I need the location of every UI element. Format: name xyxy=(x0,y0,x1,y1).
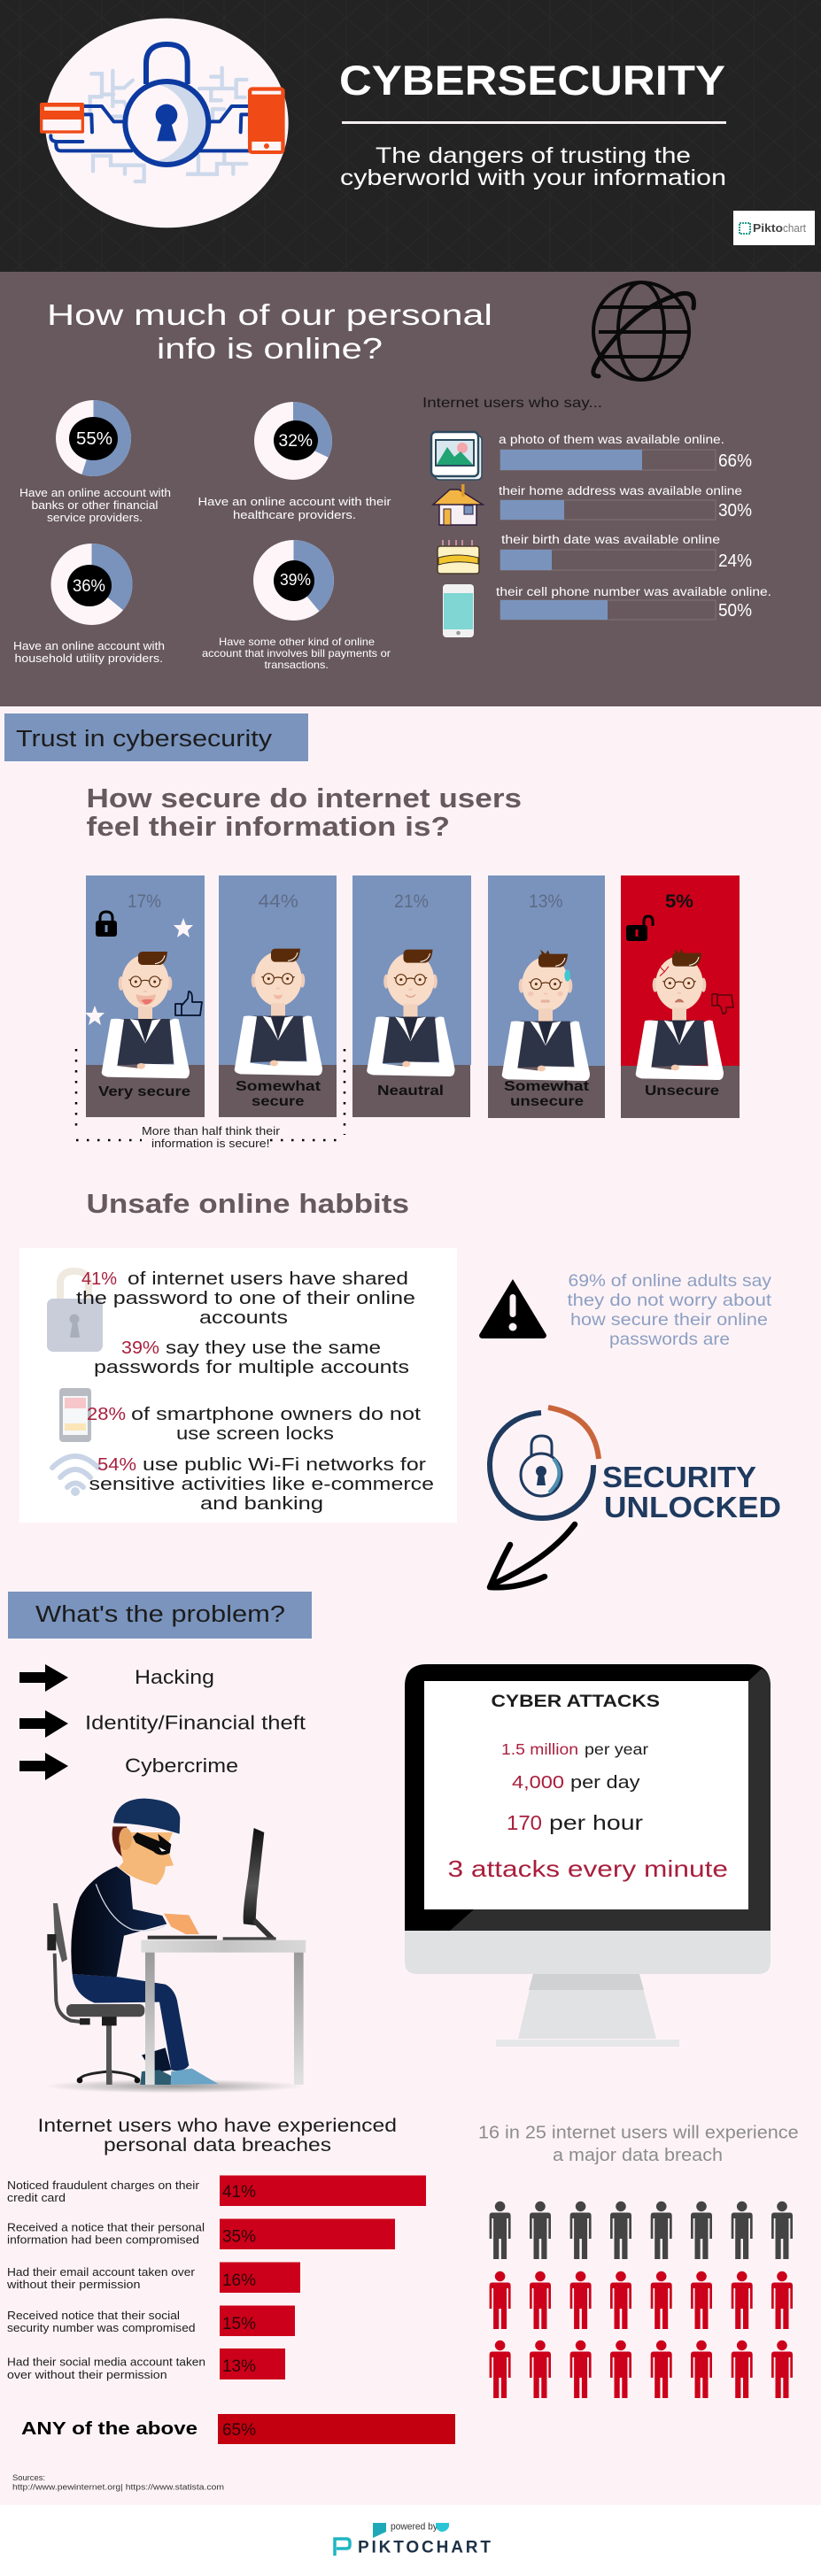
section banner: what's the problem: What's the problem? xyxy=(35,1602,285,1627)
icon: cake xyxy=(438,540,479,574)
bar label: home address: their home address was available online xyxy=(499,484,742,497)
stat: per day xyxy=(512,1773,639,1793)
stat: 39%: say they use the same xyxy=(166,1338,381,1358)
callout: dotted bracket xyxy=(76,1049,345,1150)
heading: info is online? xyxy=(157,332,383,365)
bar: 30% xyxy=(500,500,752,521)
stat: per day: 4,000 xyxy=(512,1773,564,1793)
icon: phone xyxy=(443,584,474,637)
illustration: monitor with attack stats xyxy=(405,1664,771,2047)
character: worried xyxy=(502,950,590,1081)
caption: 55%: service providers. xyxy=(47,512,143,524)
row: red people xyxy=(490,2271,793,2329)
stat: 28%: use screen locks xyxy=(176,1424,334,1444)
bar: 50%: 50% xyxy=(718,601,752,621)
icon: faded phone xyxy=(59,1388,91,1442)
heading: data breaches xyxy=(37,2115,397,2156)
chart column: neutral: 21% xyxy=(394,891,429,912)
icon: teal badge xyxy=(436,2523,449,2532)
stat: 41% xyxy=(76,1269,415,1328)
stat: 54%: and banking xyxy=(200,1494,323,1514)
arrow xyxy=(19,1664,68,1692)
bar chart: data breaches xyxy=(6,2176,455,2444)
heading: how secure xyxy=(87,783,522,842)
bar: 66% xyxy=(500,450,752,471)
donut: 36% xyxy=(51,544,133,625)
caption: 36% xyxy=(13,640,165,665)
stat: 41%: accounts xyxy=(199,1308,288,1328)
sources xyxy=(12,2473,224,2493)
stat: 54%: 54% xyxy=(97,1455,136,1475)
text block: 69% callout: how secure their online xyxy=(570,1310,768,1330)
chart column: somewhat secure: 44% xyxy=(259,891,298,912)
row: social media: 13% xyxy=(222,2357,256,2376)
caption: 32%: healthcare providers. xyxy=(233,508,356,521)
wordmark xyxy=(602,1461,781,1523)
row: email account: Had their email account taken over xyxy=(7,2265,196,2279)
bar: 66%: 66% xyxy=(718,451,752,471)
stat: 41%: 41% xyxy=(81,1269,117,1289)
row: personal information xyxy=(7,2218,395,2249)
text block: 69% callout: 69% of online adults say xyxy=(569,1271,771,1291)
heading: 16 in 25: 16 in 25 internet users will experience xyxy=(478,2124,799,2143)
monitor screen xyxy=(424,1681,748,1909)
caption: 55%: Have an online account with xyxy=(19,487,171,499)
label xyxy=(504,1079,589,1109)
label: Very secure xyxy=(98,1084,190,1099)
row: social security: Received notice that their social xyxy=(7,2309,180,2322)
bar: 50% xyxy=(500,600,752,621)
label: Somewhat xyxy=(504,1079,589,1094)
row: fraudulent charges: Noticed fraudulent charges on their xyxy=(7,2179,200,2192)
subheading: internet users who say: Internet users who say... xyxy=(422,396,602,411)
header illustration: padlock with hands xyxy=(40,19,289,228)
text block: 69% callout xyxy=(567,1271,772,1349)
icon: closed lock xyxy=(96,912,117,937)
icon: thumbs up xyxy=(175,991,202,1015)
row: personal information: Received a notice that their personal xyxy=(7,2221,205,2234)
row: red people xyxy=(490,2341,793,2398)
Piktochart badge: chart xyxy=(783,221,806,235)
heading: unsafe online habits: Unsafe online habbits xyxy=(87,1188,409,1219)
row: fraudulent charges xyxy=(7,2176,426,2206)
row: social media: over without their permission xyxy=(7,2368,167,2381)
title: CYBERSECURITY xyxy=(339,58,725,104)
heading: how secure: feel their information is? xyxy=(87,811,450,842)
pictogram: 16 in 25 people xyxy=(490,2202,793,2398)
icon: star xyxy=(174,918,193,937)
bar: 24% xyxy=(500,550,752,571)
stat: 54% xyxy=(89,1455,434,1514)
footer: powered by Piktochart xyxy=(0,2505,821,2576)
sources: Sources: xyxy=(12,2473,45,2483)
stat: 39%: passwords for multiple accounts xyxy=(94,1358,409,1377)
bar label: birth date: their birth date was available online xyxy=(501,533,720,546)
subtitle: The dangers of trusting the xyxy=(376,143,691,168)
heading: 16 in 25 xyxy=(478,2124,799,2165)
stat: 28%: of smartphone owners do not xyxy=(131,1405,422,1424)
stat: per hour: 170 xyxy=(507,1811,542,1834)
row: email account xyxy=(6,2263,300,2293)
character: happy xyxy=(102,952,190,1078)
heading: How much of our personal xyxy=(47,298,492,331)
heading xyxy=(47,298,492,365)
chart column: very secure xyxy=(85,875,205,1117)
row: social media: Had their social media account taken xyxy=(7,2356,205,2369)
label: unsecure xyxy=(510,1094,584,1109)
donut: 55%: 55% xyxy=(76,429,112,449)
icon: faded padlock xyxy=(47,1271,103,1352)
donut: 32%: 32% xyxy=(278,431,313,451)
section banner: trust in cybersecurity xyxy=(4,713,308,761)
stat: per hour: per hour xyxy=(549,1811,643,1834)
caption: 39%: account that involves bill payments or xyxy=(202,647,391,659)
character: neutral xyxy=(367,950,454,1076)
label: Neautral xyxy=(377,1084,444,1099)
screen title: CYBER ATTACKS xyxy=(491,1693,660,1711)
stat: 41%: the password to one of their online xyxy=(76,1289,415,1308)
row: social security: security number was compromised xyxy=(7,2321,195,2334)
row: any of the above xyxy=(21,2414,455,2444)
caption: 39%: transactions. xyxy=(264,659,329,671)
chart column: neutral xyxy=(352,875,471,1117)
header band xyxy=(0,0,821,272)
subtitle xyxy=(340,143,726,190)
chart column: very secure: 17% xyxy=(128,891,161,912)
wordmark: SECURITY xyxy=(602,1461,756,1493)
character: angry xyxy=(636,949,724,1080)
bar: 24%: 24% xyxy=(718,551,752,571)
icon: thumbs down xyxy=(712,994,733,1014)
icon: faded wifi xyxy=(52,1456,98,1493)
row: social security: 15% xyxy=(222,2315,256,2333)
caption: 36%: Have an online account with xyxy=(13,640,165,652)
row: fraudulent charges: credit card xyxy=(7,2191,66,2204)
sources: http://www.pewinternet.org| https://www.statista.com xyxy=(12,2482,224,2493)
illustration: hacker at desk xyxy=(44,1799,306,2094)
icon: open lock xyxy=(626,916,653,941)
caption: 39% xyxy=(202,636,391,671)
stat: per hour xyxy=(507,1811,643,1834)
bar label: photo: a photo of them was available online. xyxy=(499,433,724,446)
panel: habits list xyxy=(19,1248,457,1523)
wordmark: PIKTOCHART xyxy=(358,2538,491,2557)
row: personal information: information had been compromised xyxy=(7,2233,199,2247)
stat: 54%: sensitive activities like e-commerce xyxy=(89,1475,434,1494)
list: problems xyxy=(19,1664,306,1780)
label: secure xyxy=(252,1094,305,1109)
stat: 28%: 28% xyxy=(87,1405,126,1424)
caption: 55% xyxy=(19,487,171,524)
arrow: pointing to next section xyxy=(490,1524,575,1587)
donut: 32% xyxy=(254,402,332,480)
orange arc xyxy=(548,1408,599,1459)
item: identity theft: Identity/Financial theft xyxy=(85,1712,306,1733)
caption: 32% xyxy=(198,495,391,521)
caption: 36%: household utility providers. xyxy=(14,652,163,665)
row: gray people xyxy=(490,2202,793,2259)
arrow xyxy=(19,1753,68,1780)
label xyxy=(236,1079,321,1109)
donut: 36%: 36% xyxy=(73,576,105,596)
caption: 39%: Have some other kind of online xyxy=(219,636,375,648)
chart column: unsecure: 5% xyxy=(665,891,693,912)
padlock xyxy=(521,1436,562,1496)
text block: 69% callout: passwords are xyxy=(609,1330,730,1349)
stat: 28% xyxy=(87,1405,422,1444)
label: Somewhat xyxy=(236,1079,321,1094)
stat: 39%: 39% xyxy=(121,1338,159,1358)
row: any of the above: 65% xyxy=(222,2421,256,2440)
chart column: somewhat secure xyxy=(219,875,337,1117)
section banner: trust in cybersecurity: Trust in cybersecurity xyxy=(16,727,272,752)
row: fraudulent charges: 41% xyxy=(222,2183,256,2202)
bar label: cell phone: their cell phone number was available online. xyxy=(496,585,771,598)
stat: 39% xyxy=(94,1338,409,1377)
stat: per year: 1.5 million xyxy=(501,1740,578,1758)
logo: security unlocked xyxy=(490,1408,781,1523)
caption: 55%: banks or other financial xyxy=(32,499,158,512)
panel: how much personal info is online xyxy=(0,272,821,706)
character: content xyxy=(235,949,322,1076)
icon: star xyxy=(85,1006,105,1025)
subtitle: cyberworld with your information xyxy=(340,166,726,190)
row: social media xyxy=(7,2348,285,2381)
label: Unsecure xyxy=(645,1084,719,1099)
donut: 39% xyxy=(253,540,334,621)
item: cybercrime: Cybercrime xyxy=(125,1755,238,1777)
chart column: unsecure xyxy=(621,875,740,1118)
donut: 55% xyxy=(56,400,131,476)
caption: 32%: Have an online account with their xyxy=(198,495,391,508)
chart column: somewhat unsecure xyxy=(488,875,605,1118)
section banner: what's the problem xyxy=(8,1592,312,1639)
chart column: somewhat unsecure: 13% xyxy=(529,891,563,912)
row: email account: without their permission xyxy=(6,2278,141,2291)
title rule xyxy=(342,121,726,124)
arrow xyxy=(19,1710,68,1738)
dark ring xyxy=(490,1413,593,1518)
heading: how secure: How secure do internet users xyxy=(87,783,522,814)
stat: per year: per year xyxy=(585,1740,648,1758)
stat: 54%: use public Wi-Fi networks for xyxy=(143,1455,426,1475)
row: personal information: 35% xyxy=(222,2228,256,2247)
donut: 39%: 39% xyxy=(280,571,311,589)
callout: dotted bracket: More than half think their xyxy=(142,1125,280,1138)
row: social security xyxy=(7,2305,295,2336)
wordmark: UNLOCKED xyxy=(604,1491,781,1523)
icon: photo xyxy=(431,432,482,480)
icon: teal flag xyxy=(373,2523,386,2538)
stat: per minute: 3 attacks every minute xyxy=(448,1855,728,1882)
stat: per day: per day xyxy=(570,1773,639,1793)
Piktochart badge xyxy=(733,211,815,245)
stat: 41%: of internet users have shared xyxy=(128,1269,408,1289)
icon: warning triangle xyxy=(479,1279,546,1338)
stat: per year xyxy=(501,1740,648,1758)
icon: house xyxy=(433,484,483,525)
heading: data breaches: personal data breaches xyxy=(104,2134,331,2156)
heading: 16 in 25: a major data breach xyxy=(553,2146,723,2165)
item: hacking: Hacking xyxy=(135,1666,214,1688)
text block: 69% callout: they do not worry about xyxy=(567,1291,772,1310)
heading: data breaches: Internet users who have experienced xyxy=(37,2115,397,2136)
row: email account: 16% xyxy=(222,2271,256,2290)
callout: dotted bracket: information is secure! xyxy=(151,1138,269,1150)
icon: P mark xyxy=(335,2539,350,2556)
icon: globe xyxy=(593,282,693,380)
Piktochart badge: Pikto xyxy=(753,221,783,235)
bar: 30%: 30% xyxy=(718,501,752,521)
powered by: powered by xyxy=(391,2522,438,2533)
row: any of the above: ANY of the above xyxy=(21,2419,198,2439)
